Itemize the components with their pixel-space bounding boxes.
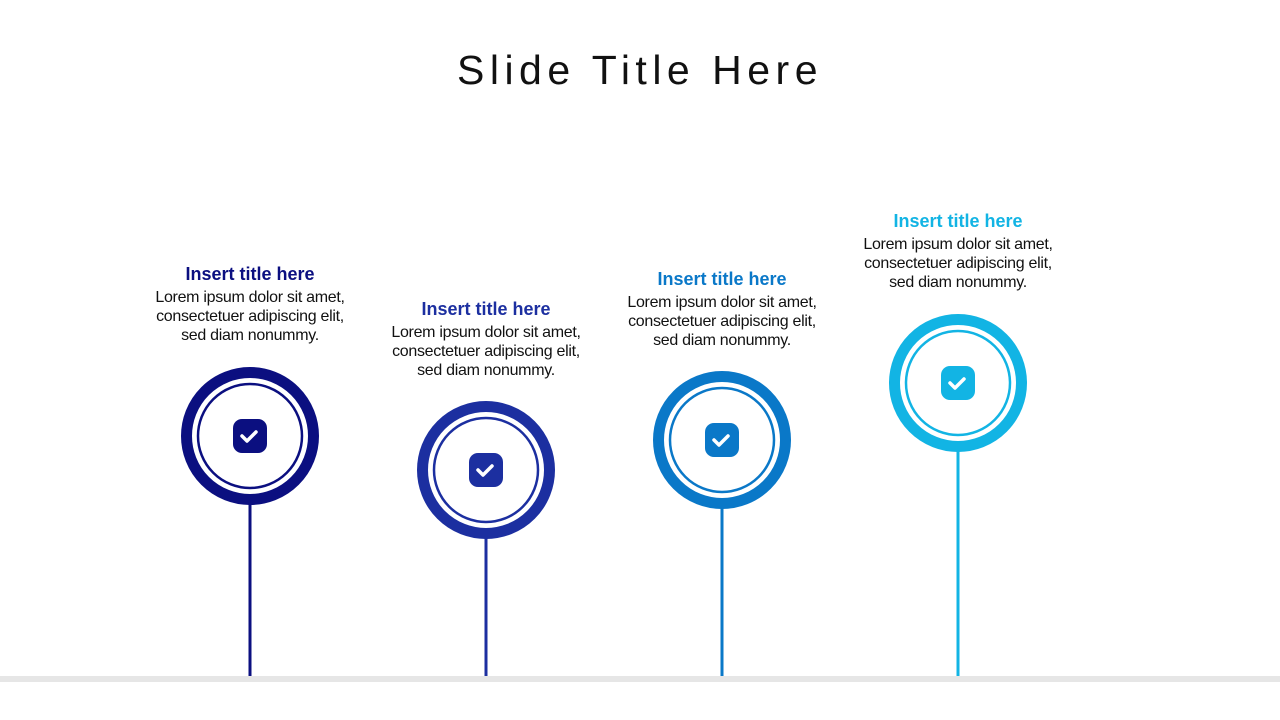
text block 4 [863, 211, 1053, 291]
text block 4: Lorem ipsum dolor sit amet, [863, 236, 1053, 253]
text block 1: consectetuer adipiscing elit, [156, 308, 344, 325]
text block 4: sed diam nonummy. [889, 274, 1027, 291]
text block 2: Lorem ipsum dolor sit amet, [391, 324, 581, 341]
text block 1 [155, 264, 345, 344]
baseline bar [0, 676, 1280, 682]
text block 3: sed diam nonummy. [653, 332, 791, 349]
text block 3: Lorem ipsum dolor sit amet, [627, 294, 817, 311]
text block 2: consectetuer adipiscing elit, [392, 343, 580, 360]
marker 1 [186, 372, 314, 676]
title: Slide Title Here [457, 47, 823, 93]
text block 4: consectetuer adipiscing elit, [864, 255, 1052, 272]
text block 1: Insert title here [185, 264, 315, 284]
text block 1: sed diam nonummy. [181, 327, 319, 344]
text block 2: Insert title here [421, 299, 551, 319]
text block 2 [391, 299, 581, 379]
marker 2 [422, 406, 550, 676]
text block 3 [627, 269, 817, 349]
text block 3: Insert title here [657, 269, 787, 289]
text block 3: consectetuer adipiscing elit, [628, 313, 816, 330]
marker 3 [658, 376, 786, 676]
marker 4 [894, 320, 1022, 676]
text block 4: Insert title here [893, 211, 1023, 231]
text block 2: sed diam nonummy. [417, 362, 555, 379]
text block 1: Lorem ipsum dolor sit amet, [155, 289, 345, 306]
